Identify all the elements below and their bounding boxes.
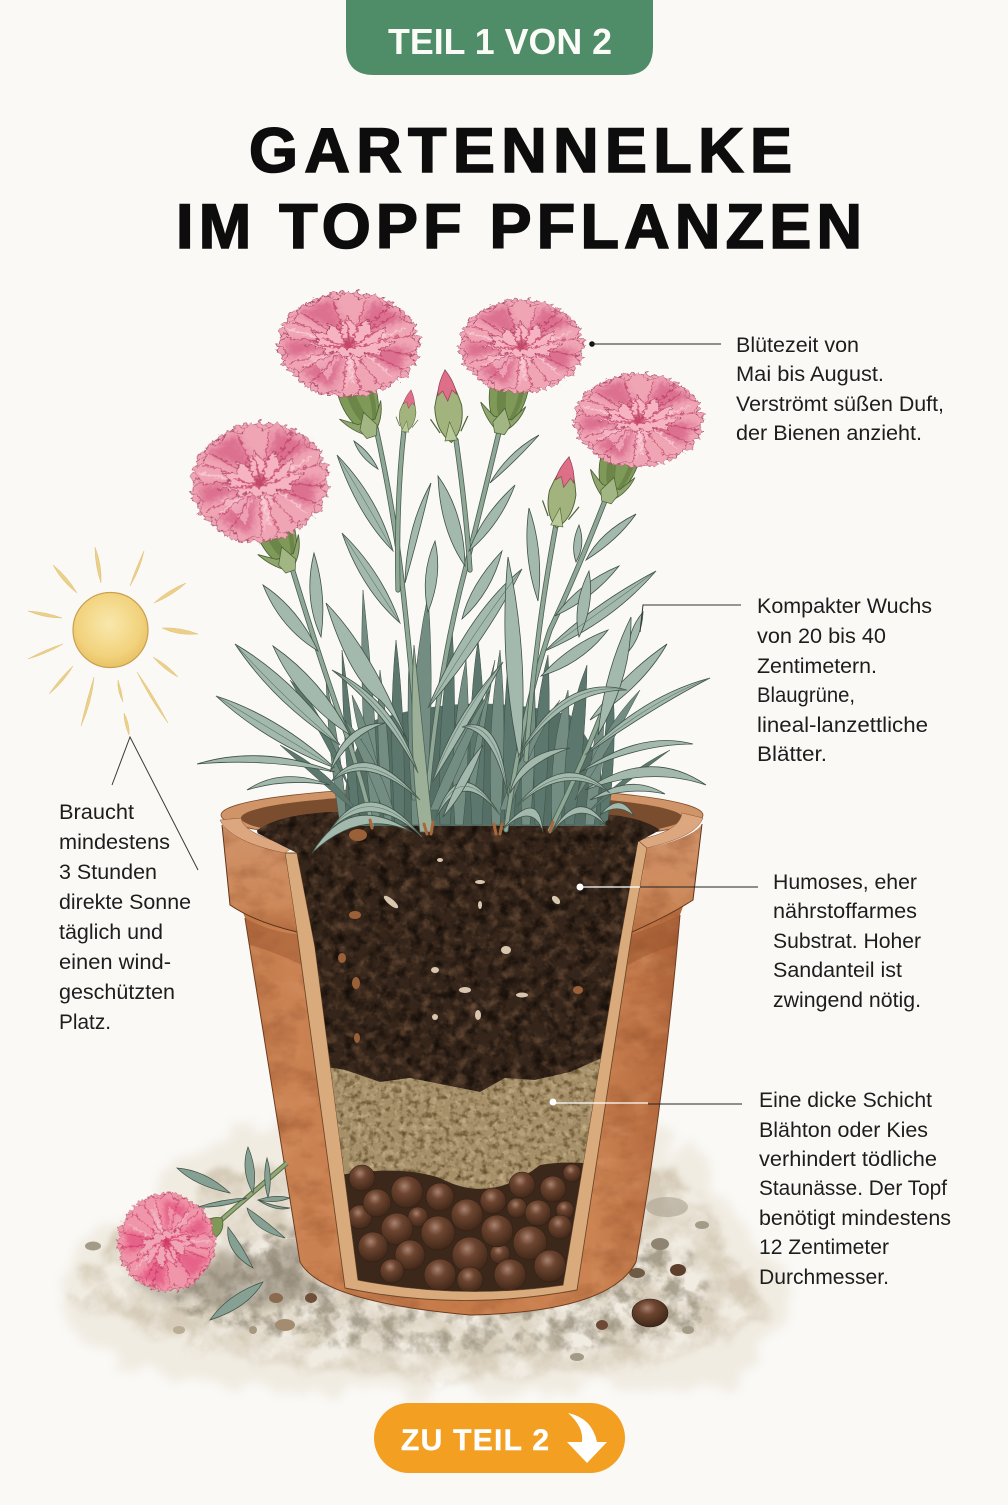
annotation: growth (757, 595, 932, 766)
plant: bud right (538, 454, 587, 531)
soil: light flecks (382, 858, 562, 1020)
plant: front arching leaves (312, 662, 634, 853)
annotation: substrate: zwingend nötig. (773, 989, 921, 1012)
annotation: blooming: Mai bis August. (736, 363, 884, 386)
annotation: sunlight (59, 801, 191, 1034)
annotation: substrate: Sandanteil ist (773, 959, 902, 982)
pot: left rim top band (220, 818, 293, 853)
annotation: drainage (759, 1089, 951, 1289)
button: next part: ZU TEIL 2 (401, 1424, 549, 1457)
pot contents: cross-section layers (250, 805, 680, 1300)
annotation: substrate: Humoses, eher (773, 871, 917, 894)
plant: flower stems (292, 428, 610, 830)
button: next part (374, 1403, 625, 1473)
annotation: drainage: Staunässe. Der Topf (759, 1177, 947, 1200)
annotation: growth: von 20 bis 40 (757, 625, 886, 648)
pot: right rim face (632, 824, 702, 932)
annotation: sunlight: täglich und (59, 921, 163, 944)
leader: blooming note (589, 341, 721, 347)
flower: right carnation (555, 361, 719, 477)
pot: left rim face (222, 825, 297, 932)
ground wash beneath the pot (50, 1115, 785, 1394)
plant: calyx of upper left flower (329, 374, 391, 445)
leader: substrate note (576, 884, 758, 890)
pot: outer wall (238, 893, 688, 1315)
header tab: part label: TEIL 1 VON 2 (388, 21, 612, 62)
annotation: growth: Blätter. (757, 743, 827, 766)
annotation: sunlight: mindestens (59, 831, 170, 854)
annotation: drainage: Durchmesser. (759, 1266, 889, 1289)
title: IM TOPF PFLANZEN (176, 192, 862, 262)
annotation: blooming: der Bienen anzieht. (736, 422, 922, 445)
annotation: drainage: benötigt mindestens (759, 1207, 951, 1230)
leader: drainage note (550, 1098, 742, 1106)
plant: calyx of left flower (247, 508, 309, 580)
header tab: part label (346, 0, 653, 75)
annotation: growth: Blaugrüne, (757, 684, 855, 707)
layer: expanded clay bed (344, 1162, 584, 1292)
pot: cut wall strips and base (285, 840, 647, 1301)
plant: stem base tints (370, 820, 553, 834)
icon: sun with rays (28, 547, 198, 735)
annotation: drainage: Blähton oder Kies (759, 1119, 928, 1142)
annotation: growth: Kompakter Wuchs (757, 595, 932, 618)
leader: growth note (640, 605, 741, 632)
icon: curved down arrow (567, 1413, 607, 1463)
annotation: sunlight: geschützten (59, 981, 175, 1004)
carnation plant (162, 277, 719, 853)
pot: back rim and inner wall (221, 787, 703, 843)
annotation: sunlight: 3 Stunden (59, 861, 157, 884)
annotation: sunlight: einen wind- (59, 951, 171, 974)
annotation: blooming (736, 334, 944, 445)
plant: calyx of upper centre flower (475, 370, 532, 438)
layer: sand (327, 1041, 604, 1292)
annotation: blooming: Blütezeit von (736, 334, 859, 357)
annotation: drainage: 12 Zentimeter (759, 1236, 889, 1259)
plant: dense back leaves (280, 590, 670, 826)
leader: sun note (112, 737, 198, 870)
title: GARTENNELKE (249, 116, 792, 186)
annotation: drainage: Eine dicke Schicht (759, 1089, 932, 1112)
annotation: substrate (773, 871, 921, 1012)
title (176, 116, 862, 262)
clay pebble (632, 1299, 668, 1327)
pot: right rim top band (638, 813, 703, 848)
annotation: drainage: verhindert tödliche (759, 1148, 937, 1171)
annotation: growth: Zentimetern. (757, 655, 877, 678)
flower: top left carnation (257, 277, 437, 409)
annotation: growth: lineal-lanzettliche (757, 714, 928, 737)
annotation: sunlight: Braucht (59, 801, 134, 824)
plant: leaf midribs (216, 455, 710, 837)
layer: expanded clay pellets (348, 1164, 581, 1293)
flower: left carnation (162, 395, 354, 567)
terracotta pot, cut-away (220, 787, 703, 1315)
plant: upper stem leaves (263, 435, 656, 762)
layer: potting soil (250, 805, 680, 1092)
flower: top centre carnation (441, 287, 599, 403)
annotation: sunlight: direkte Sonne (59, 891, 191, 914)
annotation: substrate: Substrat. Hoher (773, 930, 921, 953)
plant: central stem (412, 645, 433, 832)
annotation: blooming: Verströmt süßen Duft, (736, 393, 944, 416)
plant: calyx of right flower (583, 438, 643, 508)
fallen sprig: leaves and detached carnation (89, 1147, 290, 1321)
pot: under-rim shadow (245, 915, 680, 965)
plant: bud small (394, 388, 422, 435)
plant: bud centre (426, 368, 470, 444)
plant: outer arching leaves (197, 603, 710, 800)
annotation: sunlight: Platz. (59, 1011, 111, 1034)
annotation: substrate: nährstoffarmes (773, 900, 917, 923)
